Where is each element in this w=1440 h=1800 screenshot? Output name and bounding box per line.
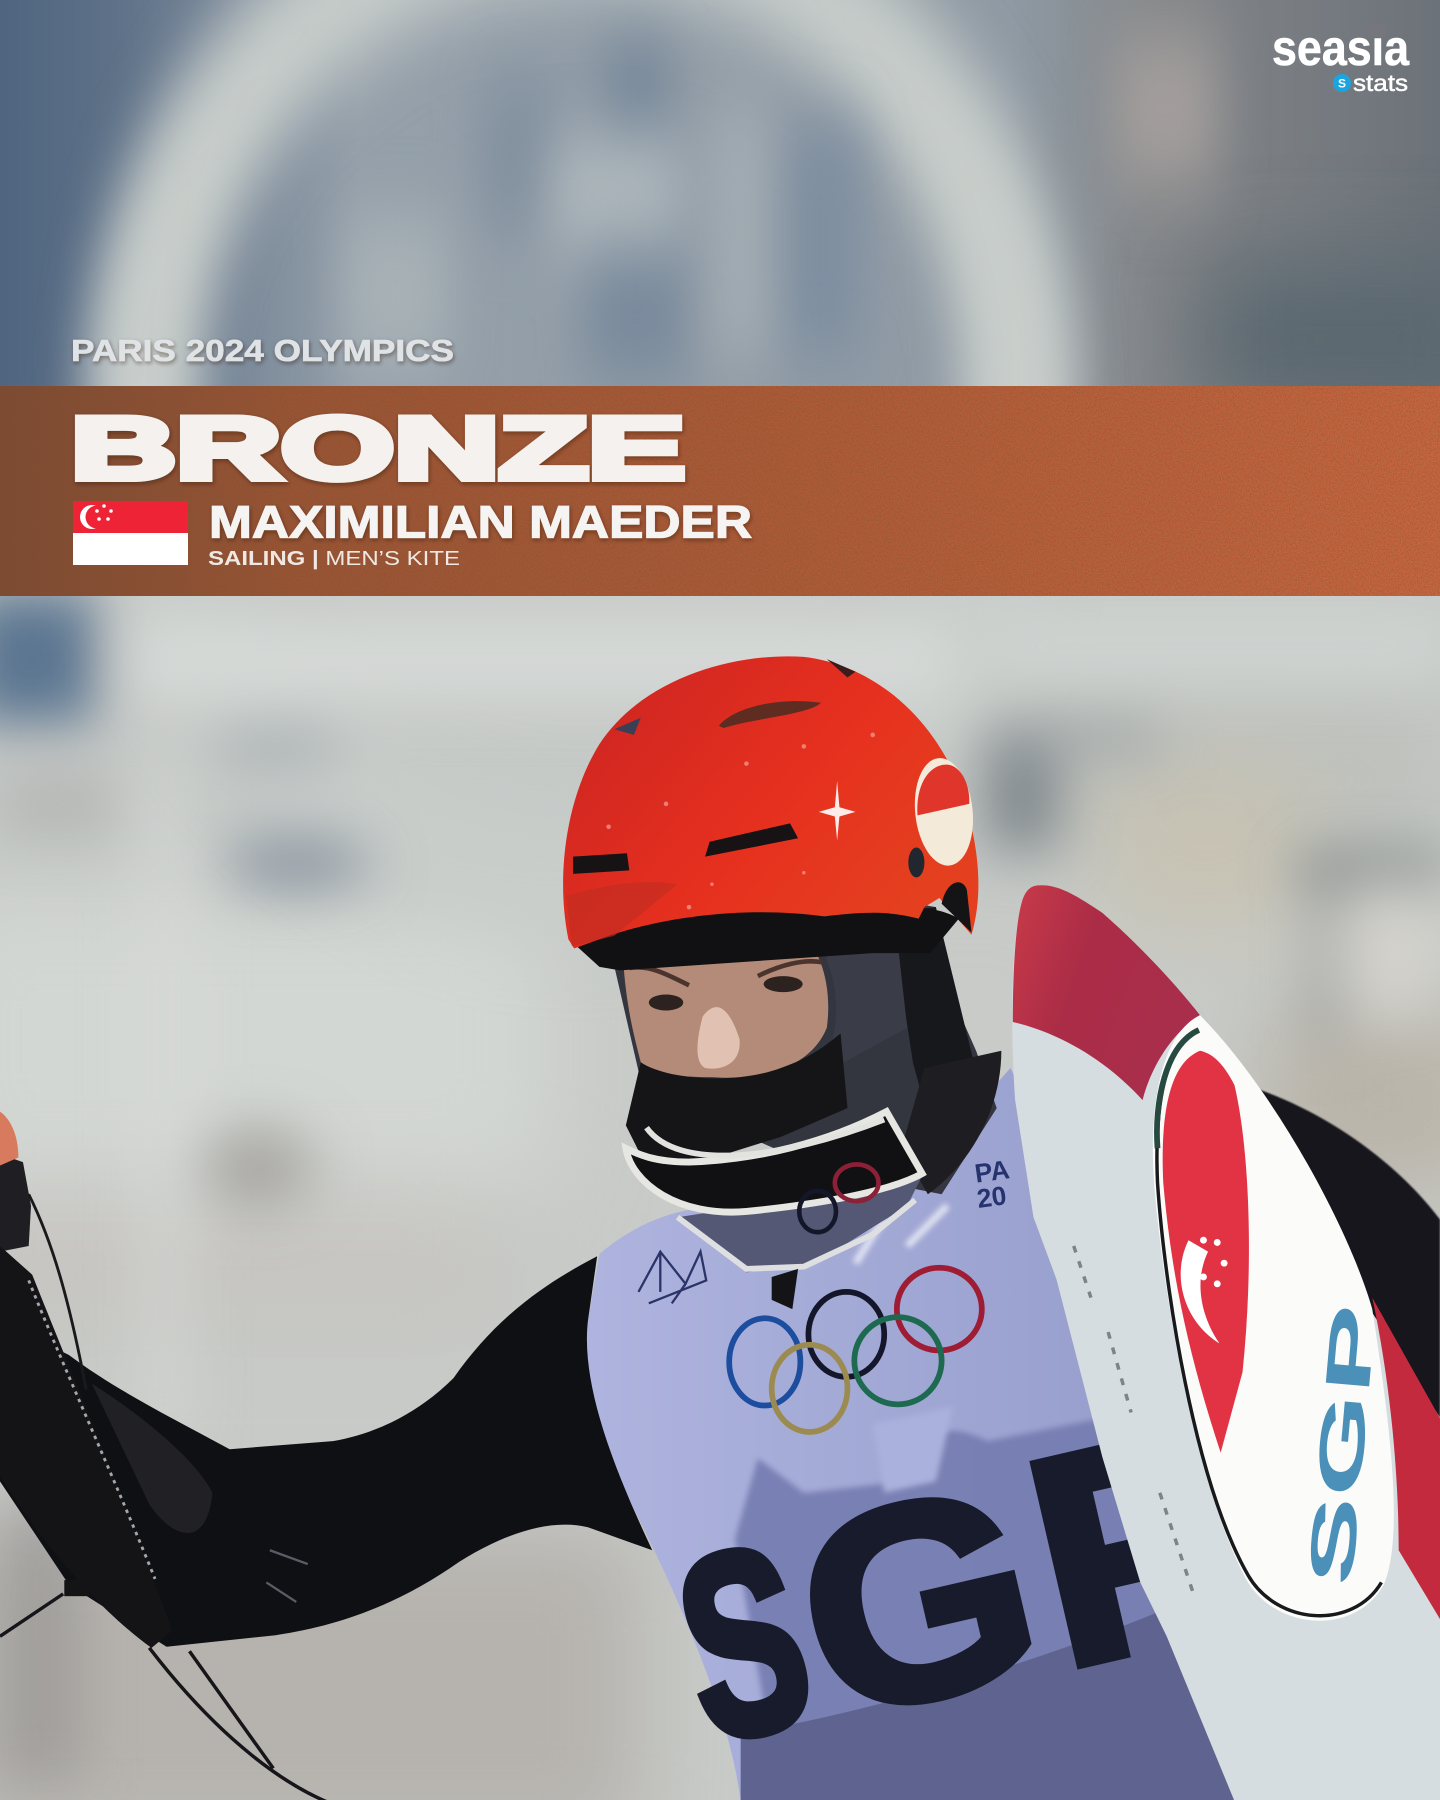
SGP lettering: P <box>1002 1363 1272 1729</box>
event label: PARIS 2024 OLYMPICS <box>71 333 454 368</box>
athlete name: MAXIMILIAN MAEDER <box>209 496 752 548</box>
board oval graphic <box>1153 1015 1394 1621</box>
bib shadow shade <box>732 1418 1156 1724</box>
balaclava <box>609 896 997 1194</box>
bib <box>587 1068 1298 1800</box>
small bib mark: PA <box>973 1154 1011 1189</box>
arm in black wetsuit <box>0 1256 652 1647</box>
mesh face mask <box>626 1033 847 1166</box>
goggles <box>626 1112 924 1309</box>
discipline: SAILING | MEN’S KITE <box>208 548 460 570</box>
SGP lettering: G <box>772 1424 1065 1778</box>
strap behind board <box>1260 1088 1440 1418</box>
kiteboard <box>1012 885 1440 1800</box>
heading: bronze: BRONZE <box>71 398 685 498</box>
bib: 20 <box>975 1180 1008 1214</box>
kite handle and leash <box>0 1112 344 1800</box>
photo: athlete with board <box>0 656 1440 1800</box>
face <box>624 924 907 1078</box>
SGP lettering <box>682 1444 1140 1740</box>
flag of Singapore <box>73 501 188 565</box>
helmet sticker <box>910 755 978 869</box>
kiteboard: SGP <box>1295 1302 1390 1588</box>
logo icon: S <box>1338 76 1346 90</box>
logo: seasia stats: stats <box>1353 70 1408 96</box>
helmet <box>563 656 978 970</box>
logo: seasia stats: seasia <box>1272 20 1410 76</box>
cover for i dot <box>1368 24 1386 37</box>
helmet glint <box>819 781 856 841</box>
SGP lettering: S <box>655 1488 833 1797</box>
logo: seasia stats <box>1272 20 1410 96</box>
olympic rings <box>729 1268 982 1432</box>
bronze band <box>0 386 1440 596</box>
